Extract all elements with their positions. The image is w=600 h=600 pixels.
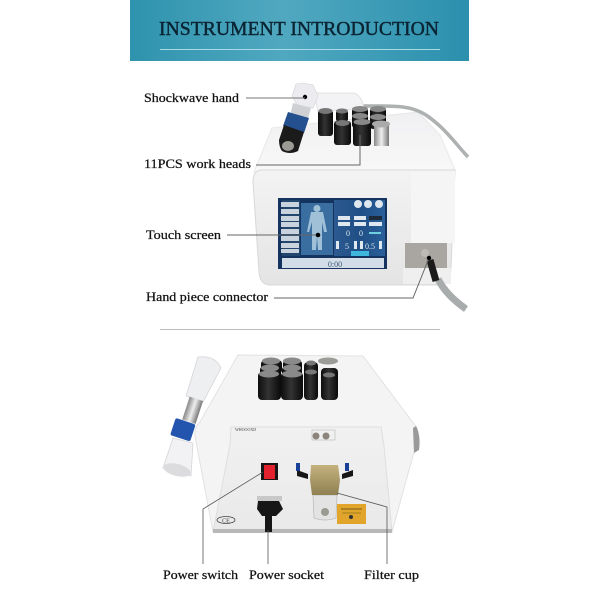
hand piece hose: [362, 106, 468, 157]
body figure: [307, 205, 327, 250]
hand piece: [162, 357, 221, 479]
device body: [195, 355, 418, 532]
touch screen: [278, 198, 387, 269]
power socket: [257, 496, 283, 532]
ce mark: CE: [222, 518, 230, 524]
device top surface: [254, 112, 455, 172]
callout: Touch screen: [146, 228, 320, 242]
touch screen: 0: [346, 229, 350, 238]
callout: Hand piece connector: Hand piece connector: [146, 290, 269, 304]
touch screen: 5: [345, 242, 349, 251]
divider: [160, 328, 440, 330]
shockwave hand piece: [279, 83, 364, 153]
device front body: [253, 170, 455, 285]
serial label: WHOOOXD: [235, 427, 256, 432]
touch screen: 0.5: [365, 242, 375, 251]
header banner: [130, 0, 469, 61]
title: INSTRUMENT INTRODUCTION: [159, 18, 439, 40]
gauges: [312, 430, 335, 440]
recessed rear panel: [213, 427, 392, 532]
hand piece connector plate: [405, 243, 447, 268]
callout: Power socket: Power socket: [249, 568, 325, 582]
device: rear view: [162, 355, 420, 533]
callout: Power switch: [163, 472, 263, 582]
callout: 11PCS work heads: 11PCS work heads: [144, 157, 251, 171]
filter cup: [296, 463, 353, 520]
callout: Shockwave hand: Shockwave hand: [144, 91, 240, 105]
ce mark: [217, 516, 235, 524]
callout: Hand piece connector: [146, 256, 431, 304]
callout: 11PCS work heads: [144, 135, 360, 171]
callout: Power socket: [249, 530, 325, 582]
device: front view: [253, 83, 468, 309]
touch screen: 0: [359, 229, 363, 238]
callout: Touch screen: Touch screen: [146, 228, 222, 242]
work heads: [318, 106, 390, 146]
power switch: [261, 463, 278, 480]
callout: Power switch: Power switch: [163, 568, 239, 582]
callout: Filter cup: Filter cup: [364, 568, 419, 582]
touch screen: 0:00: [328, 260, 342, 269]
work heads: [258, 358, 338, 400]
hand piece cable and plug: [421, 249, 466, 309]
callout: Filter cup: [337, 493, 419, 582]
warning label: [337, 504, 366, 524]
